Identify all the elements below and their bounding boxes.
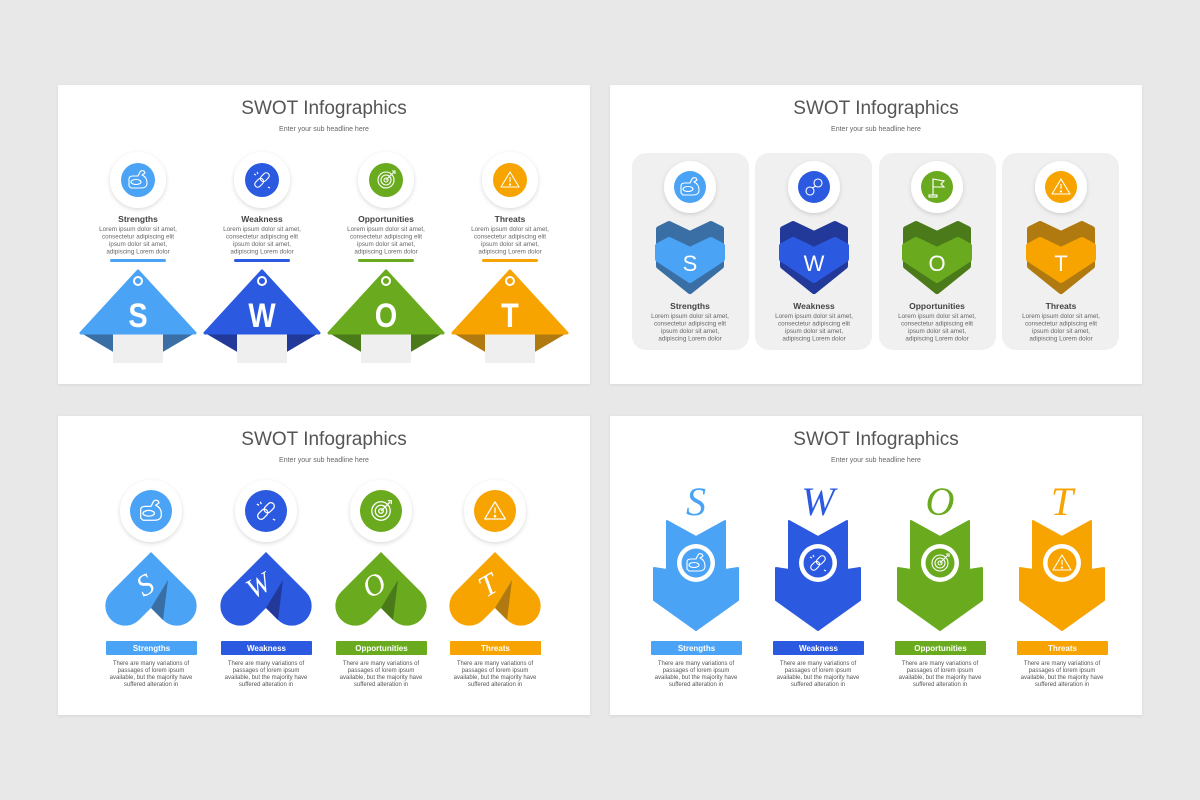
item: weakness: [773, 479, 864, 688]
item: strengths: ipsum dolor sit amet,: [109, 241, 167, 248]
item: opportunities: passages of lorem ipsum: [907, 668, 973, 674]
item: strengths: suffered alteration in: [669, 682, 723, 688]
item: weakness: available, but the majority have: [225, 675, 308, 681]
panel: bottom-right: [610, 416, 1142, 715]
item: weakness: consectetur adipiscing elit: [226, 234, 298, 240]
item: strengths: adipiscing Lorem dolor: [106, 248, 170, 256]
item: threats: Threats: [495, 214, 526, 224]
item: threats: Threats: [481, 644, 510, 653]
item: threats: passages of lorem ipsum: [462, 668, 528, 674]
card: opportunities: [879, 153, 996, 350]
card: weakness: W: [804, 251, 825, 276]
item: weakness: W: [241, 566, 279, 606]
item: threats: T: [501, 296, 519, 335]
item: opportunities: available, but the majority have: [340, 675, 423, 681]
item: opportunities: O: [375, 296, 397, 335]
card: threats: ipsum dolor sit amet,: [1032, 328, 1090, 335]
item: strengths: S: [128, 296, 148, 335]
item: opportunities: [335, 480, 427, 688]
item: weakness: suffered alteration in: [791, 682, 845, 688]
card: weakness: consectetur adipiscing elit: [778, 320, 850, 328]
item: opportunities: There are many variations of: [902, 661, 979, 667]
card: strengths: S: [683, 251, 697, 276]
item: opportunities: Opportunities: [914, 644, 967, 653]
card: opportunities: ipsum dolor sit amet,: [908, 328, 966, 335]
card: strengths: [632, 153, 749, 350]
panel: bottom-left: [58, 416, 590, 715]
item: strengths: Strengths: [133, 644, 171, 653]
card: opportunities: O: [928, 251, 946, 276]
item: threats: passages of lorem ipsum: [1029, 668, 1095, 674]
item: weakness: passages of lorem ipsum: [785, 668, 851, 674]
subtitle: Enter your sub headline here: [831, 126, 921, 133]
card: weakness: Weakness: [793, 301, 835, 311]
card: weakness: ipsum dolor sit amet,: [785, 328, 843, 335]
item: threats: Threats: [1048, 644, 1077, 653]
card: threats: consectetur adipiscing elit: [1025, 320, 1097, 328]
item: strengths: Strengths: [678, 644, 716, 653]
item: weakness: available, but the majority have: [777, 675, 860, 681]
item: weakness: W: [248, 296, 276, 335]
item: opportunities: suffered alteration in: [354, 682, 408, 688]
item: threats: suffered alteration in: [1035, 682, 1089, 688]
item: strengths: [105, 480, 197, 688]
item: strengths: available, but the majority have: [655, 675, 738, 681]
card: strengths: Strengths: [670, 301, 710, 311]
item: weakness: W: [801, 479, 838, 524]
item: strengths: available, but the majority have: [110, 675, 193, 681]
item: weakness: Weakness: [241, 214, 283, 224]
item: threats: There are many variations of: [1024, 661, 1101, 667]
card: threats: T: [1054, 251, 1068, 276]
item: threats: [1017, 479, 1108, 688]
title: SWOT Infographics: [793, 429, 959, 450]
item: opportunities: suffered alteration in: [913, 682, 967, 688]
subtitle: Enter your sub headline here: [831, 457, 921, 464]
item: opportunities: adipiscing Lorem dolor: [354, 248, 418, 256]
card: weakness: [755, 153, 872, 350]
item: weakness: ipsum dolor sit amet,: [233, 241, 291, 248]
card: opportunities: consectetur adipiscing elit: [901, 320, 973, 328]
item: opportunities: available, but the majority have: [899, 675, 982, 681]
item: weakness: suffered alteration in: [239, 682, 293, 688]
item: threats: suffered alteration in: [468, 682, 522, 688]
item: opportunities: Opportunities: [358, 214, 414, 224]
card: threats: [1002, 153, 1119, 350]
item: opportunities: There are many variations of: [343, 661, 420, 667]
item: weakness: [205, 152, 319, 363]
panel: top-left: [58, 85, 590, 384]
title: SWOT Infographics: [793, 98, 959, 119]
item: threats: [453, 152, 567, 363]
item: strengths: [651, 479, 742, 688]
item: weakness: adipiscing Lorem dolor: [230, 248, 294, 256]
item: weakness: There are many variations of: [780, 661, 857, 667]
item: opportunities: [895, 479, 986, 688]
item: weakness: passages of lorem ipsum: [233, 668, 299, 674]
item: threats: ipsum dolor sit amet,: [481, 241, 539, 248]
item: threats: Lorem ipsum dolor sit amet,: [471, 226, 549, 233]
item: strengths: There are many variations of: [658, 661, 735, 667]
subtitle: Enter your sub headline here: [279, 457, 369, 464]
item: opportunities: Opportunities: [355, 644, 408, 653]
item: opportunities: [329, 152, 443, 363]
item: weakness: There are many variations of: [228, 661, 305, 667]
item: strengths: consectetur adipiscing elit: [102, 234, 174, 240]
item: strengths: Strengths: [118, 214, 158, 224]
item: opportunities: O: [357, 566, 392, 605]
item: threats: consectetur adipiscing elit: [474, 234, 546, 240]
item: threats: [449, 480, 541, 688]
item: weakness: [220, 480, 312, 688]
item: threats: There are many variations of: [457, 661, 534, 667]
item: opportunities: passages of lorem ipsum: [348, 668, 414, 674]
card: threats: Threats: [1046, 301, 1077, 311]
item: strengths: There are many variations of: [113, 661, 190, 667]
item: strengths: S: [686, 479, 706, 524]
item: strengths: S: [131, 567, 160, 603]
subtitle: Enter your sub headline here: [279, 126, 369, 133]
card: weakness: Lorem ipsum dolor sit amet,: [775, 313, 853, 320]
item: threats: available, but the majority have: [454, 675, 537, 681]
panel: top-right: [610, 85, 1142, 384]
item: weakness: Weakness: [799, 644, 839, 653]
card: weakness: adipiscing Lorem dolor: [782, 336, 846, 342]
card: opportunities: Lorem ipsum dolor sit amet,: [898, 313, 976, 320]
item: threats: adipiscing Lorem dolor: [478, 248, 542, 256]
card: strengths: consectetur adipiscing elit: [654, 320, 726, 328]
card: strengths: adipiscing Lorem dolor: [658, 336, 722, 342]
item: strengths: [81, 152, 195, 363]
item: threats: T: [473, 566, 506, 604]
item: strengths: passages of lorem ipsum: [118, 668, 184, 674]
card: threats: adipiscing Lorem dolor: [1029, 336, 1093, 342]
card: strengths: ipsum dolor sit amet,: [661, 328, 719, 335]
item: strengths: passages of lorem ipsum: [663, 668, 729, 674]
item: weakness: Lorem ipsum dolor sit amet,: [223, 226, 301, 233]
title: SWOT Infographics: [241, 429, 407, 450]
item: threats: T: [1051, 479, 1076, 524]
card: threats: Lorem ipsum dolor sit amet,: [1022, 313, 1100, 320]
item: weakness: Weakness: [247, 644, 287, 653]
title: SWOT Infographics: [241, 98, 407, 119]
item: threats: available, but the majority have: [1021, 675, 1104, 681]
item: strengths: Lorem ipsum dolor sit amet,: [99, 226, 177, 233]
card: opportunities: Opportunities: [909, 301, 965, 311]
card: strengths: Lorem ipsum dolor sit amet,: [651, 313, 729, 320]
item: opportunities: O: [926, 479, 954, 524]
card: opportunities: adipiscing Lorem dolor: [905, 336, 969, 342]
item: opportunities: ipsum dolor sit amet,: [357, 241, 415, 248]
item: opportunities: consectetur adipiscing elit: [350, 234, 422, 240]
item: strengths: suffered alteration in: [124, 682, 178, 688]
item: opportunities: Lorem ipsum dolor sit amet,: [347, 226, 425, 233]
